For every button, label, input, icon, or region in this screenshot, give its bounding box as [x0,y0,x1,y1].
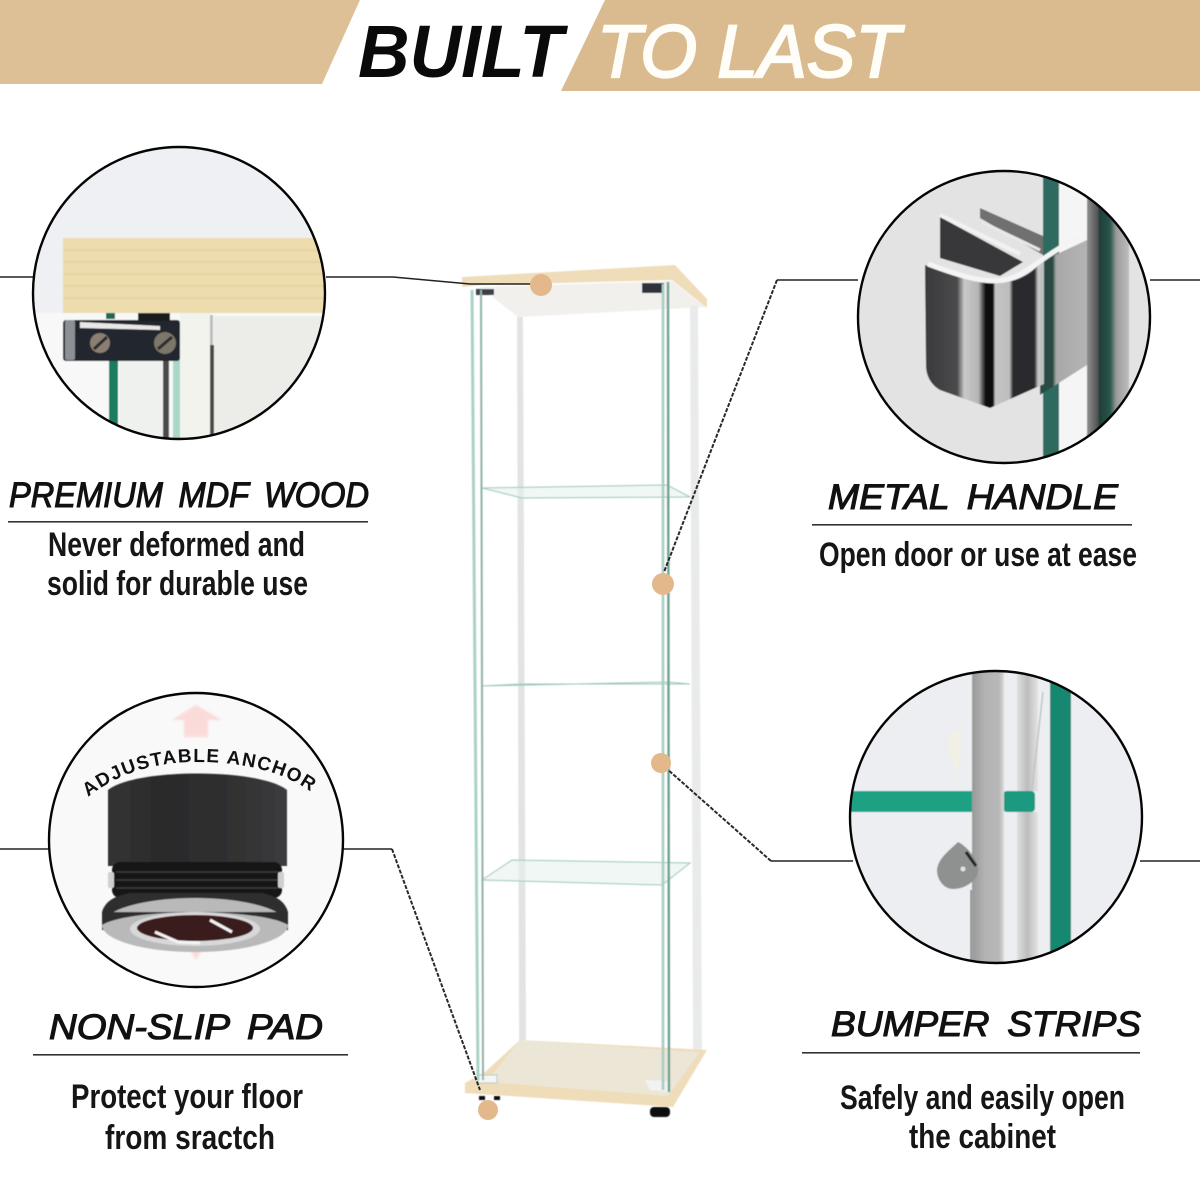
glass edges [1043,170,1129,465]
connector: pad diagonal [392,849,480,1090]
caption: bumper strips [802,1005,1141,1156]
glass under board [109,313,214,450]
back glass panels [517,306,702,1050]
marker: bumper [651,753,671,773]
pale glass fragment [948,730,962,772]
adjustable anchor label: ADJUSTABLE ANCHOR [84,748,316,797]
heading: METAL HANDLE [828,478,1119,517]
front glass panels [472,282,669,1092]
marker: handle [652,573,674,595]
left banner shape [0,0,360,84]
caption: premium mdf wood [8,476,369,603]
wood board [63,238,325,313]
marker: top board [530,274,552,296]
heading: PREMIUM MDF WOOD [9,476,369,515]
heading: NON-SLIP PAD [49,1008,323,1047]
anchor foot [102,774,288,952]
heading: built: BUILT [358,10,569,93]
description: the cabinet [909,1118,1056,1156]
callout markers [478,274,674,1120]
bottom board [465,1040,707,1117]
connector: handle diagonal [664,280,777,572]
glass shelves [482,485,690,885]
heading: BUMPER STRIPS [831,1005,1141,1044]
circle: metal handle detail [855,168,1155,468]
horizontal glass [850,791,972,812]
marker: pad [478,1100,498,1120]
connector: bumper circle horizontal [771,860,1200,862]
description: Protect your floor [71,1078,303,1116]
connector: pad circle horizontal [0,848,392,850]
description: from sractch [105,1119,275,1157]
title banner [0,0,1200,93]
metal bracket [63,313,180,361]
right banner shape [561,0,1200,91]
description: Safely and easily open [840,1079,1125,1117]
caption: metal handle [812,478,1137,574]
heading: to last: TO LAST [597,10,905,93]
cabinet top board [462,265,707,317]
pink arrow [172,705,222,737]
circle: non-slip pad detail [48,692,344,988]
description: solid for durable use [47,565,308,603]
connector: bumper diagonal [666,768,771,861]
connector: handle circle to door [777,279,1200,281]
circle: MDF wood detail [30,145,330,450]
circle: bumper strip detail [845,668,1145,968]
description: Never deformed and [48,526,305,564]
connector lines [0,277,1200,1090]
vertical glass edges [1050,668,1071,958]
display cabinet [462,265,707,1117]
handle [925,208,1087,408]
caption: non-slip pad [33,1008,348,1157]
connector: wood circle to top board [0,277,535,284]
bumper drop [937,842,978,889]
